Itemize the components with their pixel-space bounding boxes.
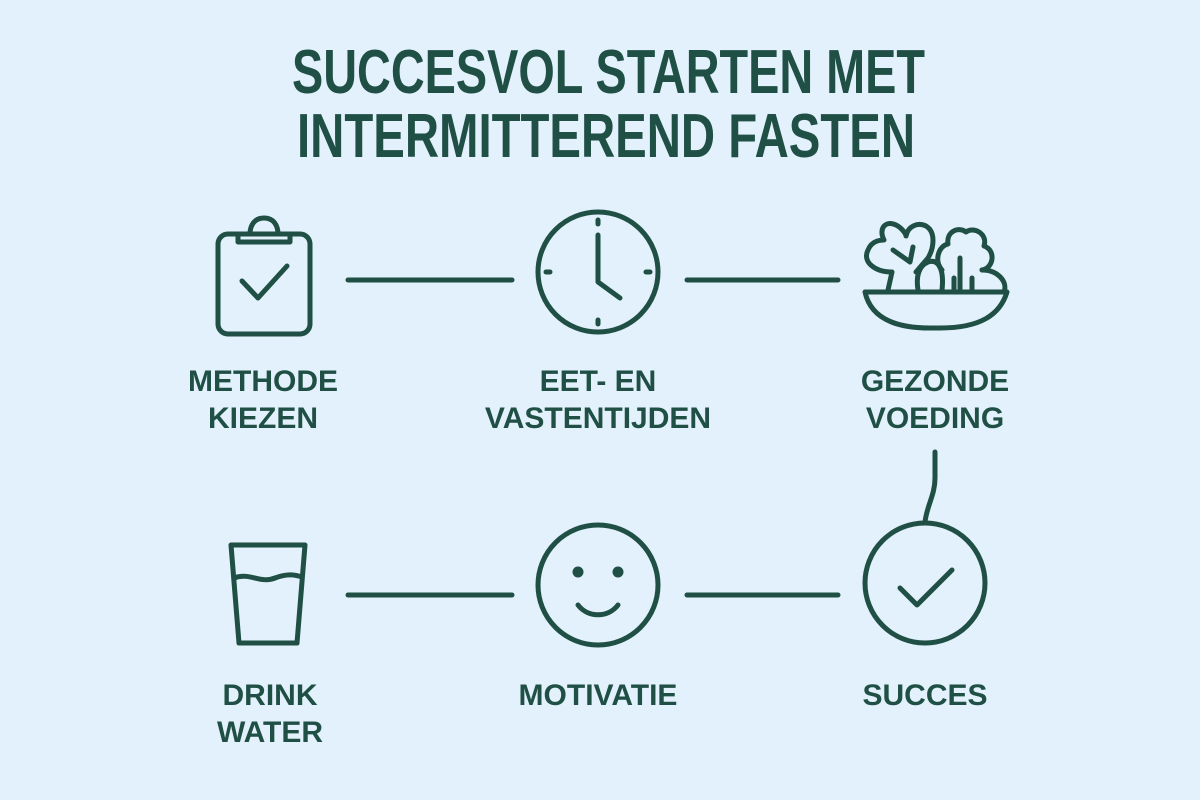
label: methode kiezen: KIEZEN (208, 402, 318, 435)
icon: glass of water (231, 545, 305, 643)
label: drink water: WATER (217, 716, 323, 749)
label: eet- en vastentijden (485, 365, 711, 435)
label: eet- en vastentijden: VASTENTIJDEN (485, 402, 711, 435)
label: methode kiezen: METHODE (188, 365, 338, 398)
icon: salad bowl (865, 223, 1007, 328)
label: drink water: DRINK (222, 679, 318, 712)
icon: clock (538, 212, 658, 332)
title: SUCCESVOL STARTEN MET (292, 38, 925, 107)
title: INTERMITTEREND FASTEN (297, 102, 915, 171)
label: succes: SUCCES (862, 679, 988, 712)
label: gezonde voeding: VOEDING (866, 402, 1004, 435)
arrow: connector down (925, 452, 935, 522)
label: methode kiezen (188, 365, 338, 435)
icon: smiley (538, 525, 658, 645)
arrow: line 1 (348, 278, 512, 282)
label: eet- en vastentijden: EET- EN (540, 365, 656, 398)
label: motivatie: MOTIVATIE (519, 679, 677, 712)
icon: clipboard (218, 218, 310, 334)
label: drink water (217, 679, 323, 749)
label: gezonde voeding (861, 365, 1009, 435)
arrow: line 2 (687, 278, 838, 282)
icon: success check (865, 523, 985, 643)
label: gezonde voeding: GEZONDE (861, 365, 1009, 398)
title (292, 38, 925, 171)
arrow: line 3 (348, 592, 512, 598)
arrow: line 4 (687, 592, 838, 598)
